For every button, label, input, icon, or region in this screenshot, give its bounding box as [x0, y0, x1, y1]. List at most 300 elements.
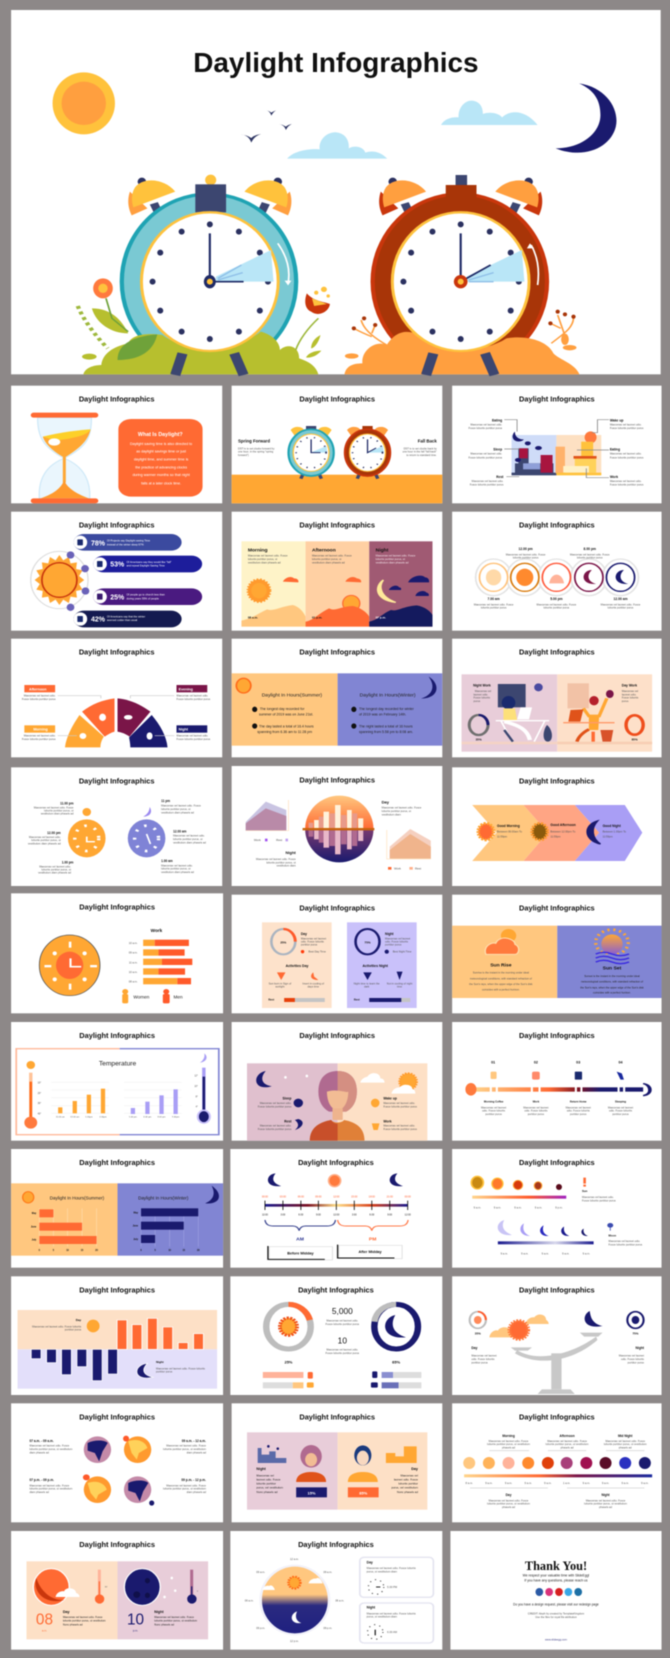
chevron: good night — [575, 805, 642, 861]
time notes: lobortis porttitor purus, ut vestibulum — [163, 1447, 207, 1451]
night side: laoreet odio. Fusce — [256, 1477, 281, 1481]
icon: red mini clock — [345, 426, 390, 479]
label: evening — [176, 685, 211, 701]
day side: laoreet odio. Fusce — [394, 1477, 418, 1481]
card: day: Activities Day — [286, 964, 308, 968]
time labels: lobortis porttitor purus — [608, 606, 634, 610]
sun phases: 9 a.m. — [514, 1206, 522, 1210]
day half: lobortis porttitor purus, ut vestibulum — [63, 1618, 106, 1622]
time axis — [262, 1196, 411, 1216]
panel: donut comparison: Daylight Infographics — [298, 1285, 374, 1294]
thermometer: hot: 10° — [38, 1082, 41, 1084]
panel: daily timeline — [452, 1022, 662, 1141]
night half: p.m. — [133, 1629, 138, 1632]
labels right: Maecenas vel laoreet odio. — [610, 422, 642, 426]
card: day: days time — [308, 984, 319, 988]
sun rise side: meteorological conditions, with standard refraction of — [470, 977, 532, 981]
panel: city globe and area charts: Daylight Infographics — [299, 775, 375, 784]
chevron: good night: Between 1.00pm To — [603, 830, 627, 834]
column: night: lobortis porttitor purus, ut — [376, 557, 405, 561]
sun rise side: coincides with a perfect horizon. — [482, 987, 520, 991]
right time notes: 1.00 am — [161, 859, 173, 863]
day work illustration: Fusce lobortis — [622, 696, 639, 700]
panel: thank you — [450, 1531, 662, 1650]
panel: balance scale: Daylight Infographics — [519, 1285, 595, 1294]
area chart day: Rest — [415, 867, 421, 871]
column: night: Night — [376, 547, 389, 553]
chevron: good morning: Good Morning — [497, 824, 520, 828]
area chart night: Work — [254, 838, 261, 842]
icon: crescent moon — [556, 83, 616, 153]
chart: winter hours: 0 — [140, 1250, 142, 1252]
red alarm clock — [344, 175, 579, 375]
sun set side: coincides with a perfect horizon. — [593, 991, 631, 995]
right time notes: vestibulum diam phasels ad — [173, 840, 206, 844]
panel: temperature charts — [11, 1022, 223, 1141]
heading row: Maecenas vel laoreet odio. Fusce — [489, 1439, 529, 1443]
time labels: Maecenas vel laoreet odio. Fusce — [537, 602, 577, 606]
panel: work chart with clock: Daylight Infographics — [79, 902, 155, 911]
left time notes: vestibulum diam phasels ad — [38, 871, 71, 875]
chart: winter hours: June — [133, 1226, 139, 1228]
panel: half day half night portrait — [232, 1022, 442, 1141]
lower notes: Maecenas vel laoreet odio. Fusce — [489, 1498, 529, 1502]
lower notes: Night — [602, 1493, 611, 1497]
note: day — [32, 1318, 100, 1332]
day work illustration: Day Work — [622, 684, 637, 688]
dial time labels: 12 p.m. — [290, 1639, 299, 1643]
heading row: Maecenas vel laoreet odio. Fusce — [547, 1439, 587, 1443]
chevron: good afternoon — [524, 805, 599, 861]
text: spring forward — [238, 439, 275, 457]
step 01 morning coffee: 01 — [491, 1061, 495, 1065]
heading: temperature: Temperature — [99, 1061, 136, 1068]
bar chart: day temperature: 2.00pm — [99, 1117, 107, 1119]
text: spring forward: Spring Forward — [238, 439, 270, 444]
card: night: time — [397, 984, 403, 988]
night side: Nunc phasels ad — [256, 1490, 278, 1494]
winter side: The longest day recorded for winter — [359, 707, 415, 711]
time labels: Maecenas vel laoreet odio. Fusce — [474, 602, 514, 606]
label: afternoon: Fusce lobortis porttitor purus — [22, 697, 56, 701]
label: evening: Maecenas vel laoreet odio. — [176, 694, 209, 698]
night half: 10 — [127, 1612, 144, 1629]
dial time labels: 09 p.m. — [256, 1626, 265, 1630]
gauge: night: Maecenas vel laoreet — [619, 1353, 644, 1357]
labels left: Fusce lobortis porttitor purus — [470, 483, 504, 487]
card: night: Night — [385, 932, 394, 936]
card: night: purus, ut vestibulum diam — [367, 1615, 398, 1619]
chevron: good morning: 11:59pm — [497, 834, 508, 838]
left time notes: Maecenas vel laoreet odio. — [39, 864, 71, 868]
time notes: Maecenas vel laoreet odio. Fusce — [29, 1483, 70, 1487]
time axis: 00:00 — [262, 1196, 269, 1199]
heading: thank you: Thank You! — [525, 1559, 587, 1573]
chart: winter hours: Daylight In Hours(Winter) — [138, 1195, 189, 1200]
step 04 sleeping: 04 — [618, 1061, 624, 1065]
night work illustration: Fusce lobortis — [474, 696, 491, 700]
time axis: 6:00 — [298, 1213, 304, 1216]
day half: Nunc phasels ad — [63, 1622, 83, 1626]
step 04 sleeping — [608, 1061, 633, 1116]
card: day: Insert in cooling of — [302, 981, 324, 985]
night half: Night — [154, 1610, 164, 1614]
bar chart: day temperature: 12.00 am — [70, 1117, 79, 1119]
hour labels: 9 a.m. — [544, 1481, 552, 1485]
card: night: Night — [367, 1606, 376, 1610]
card: night: 75% — [365, 940, 371, 944]
donut: night — [374, 1304, 418, 1364]
chart: summer hours: 5 — [53, 1250, 55, 1252]
bars: day — [117, 1318, 203, 1349]
area chart night — [246, 800, 288, 842]
night side: purus, vel vestibulum — [256, 1486, 284, 1490]
button: before midday: Before Midday — [287, 1251, 314, 1255]
panel: day and night activity cards — [232, 895, 442, 1013]
bracket: pm: PM — [369, 1236, 376, 1242]
floor band — [232, 475, 442, 503]
stat numbers — [325, 1306, 360, 1355]
moon phases: 9 a.m. — [562, 1251, 570, 1255]
icons: moons and sun — [268, 1173, 403, 1187]
time notes: 07 a.m. - 09 a.m. — [29, 1439, 54, 1443]
panel: day night dial — [230, 1531, 442, 1650]
gauge: night — [619, 1312, 645, 1365]
thank you note: If you have any questions, please reach us — [524, 1579, 588, 1583]
text: fall back: one hour in the fall "fall back" — [403, 450, 437, 454]
text: fall back: to return to standard time. — [406, 453, 437, 457]
day half: 08 — [36, 1612, 53, 1629]
stat pill 78% — [74, 534, 182, 551]
chart: summer hours: May — [32, 1213, 37, 1215]
text: spring forward: DST is to set clocks forward by — [238, 446, 275, 450]
left time notes: Maecenas vel laoreet odio. Fusce — [34, 805, 74, 809]
time notes — [29, 1439, 207, 1494]
chart: summer hours: 0 — [39, 1250, 41, 1252]
winter side: of 2019 was on February 14th. — [359, 713, 406, 717]
chevron: good afternoon: 11:59pm — [550, 834, 561, 838]
step 01 morning coffee: Maecenas vel laoreet — [481, 1105, 506, 1109]
labels right: Eating — [610, 448, 620, 452]
panel: what is daylight — [11, 386, 222, 503]
chevron: good afternoon: Between 12.00pm To — [550, 830, 576, 834]
time axis: 03:00 — [280, 1196, 287, 1199]
text: night — [256, 850, 297, 868]
text: fall back — [403, 439, 437, 457]
heading row: lobortis porttitor purus, ut vestibulum — [604, 1442, 647, 1446]
gauge: day: Day — [471, 1346, 478, 1350]
label: morning — [22, 725, 56, 741]
panel: greeting chevrons — [452, 767, 662, 886]
dial time labels: 06 a.m. — [245, 1598, 254, 1602]
day work illustration — [557, 674, 652, 752]
column: night: vestibulum diam phasels ad — [376, 560, 409, 564]
day side: lobortis porttitor — [398, 1482, 418, 1486]
night work illustration: Maecenas vel — [475, 689, 492, 693]
time notes: diam phasels ad — [29, 1450, 49, 1454]
hour labels: 9 a.m. — [583, 1481, 590, 1485]
step 01 morning coffee — [481, 1061, 506, 1116]
time axis: 9:00 — [316, 1213, 321, 1216]
chart: summer hours: 20 — [95, 1250, 99, 1252]
lower notes: Day — [506, 1493, 512, 1497]
column: night: Maecenas vel laoreet odio. Fusce — [376, 554, 416, 558]
hour labels: 8 a.m. — [466, 1481, 473, 1485]
labels left: Maecenas vel laoreet odio. — [472, 479, 504, 483]
lower notes: Maecenas vel laoreet odio. Fusce — [586, 1498, 626, 1502]
label: afternoon — [22, 685, 56, 701]
day half: Day — [63, 1610, 70, 1614]
time notes: lobortis porttitor purus, ut vestibulum — [163, 1487, 207, 1491]
day side — [338, 1432, 427, 1510]
credit text: Use the files for royal file attribution — [535, 1615, 577, 1619]
day side: purus, vel vestibulum — [391, 1486, 419, 1490]
day half: Maecenas vel laoreet odio. Fusce — [63, 1615, 103, 1619]
time axis: 00:00 — [405, 1196, 411, 1199]
stat numbers: Fusce lobortis porttitor purus — [325, 1322, 360, 1326]
dial — [261, 1566, 329, 1634]
panel: diverging bars — [11, 1276, 223, 1395]
icon: hourglass — [31, 413, 98, 503]
card: day: Best Day Time — [309, 950, 326, 954]
heading row: Mid Night — [618, 1434, 633, 1438]
gauge: day: Maecenas vel laoreet — [471, 1353, 497, 1357]
thermometer: cold: 10° — [194, 1086, 198, 1088]
heading row: lobortis porttitor purus, ut vestibulum — [487, 1442, 531, 1446]
time axis: 12:00 — [262, 1213, 269, 1216]
left time notes: 1.00 pm — [62, 860, 74, 864]
card: night: Maecenas vel laoreet — [385, 936, 411, 940]
moon phases: Maecenas vel laoreet odio. — [609, 1239, 641, 1243]
stat numbers: Maecenas vel laoreet odio. — [326, 1319, 358, 1323]
text: day: vestibulum diam — [382, 812, 402, 816]
chart: summer hours: 15 — [81, 1250, 84, 1252]
column: afternoon: 01 p.m. — [312, 616, 322, 620]
panel: night work and day work — [452, 639, 662, 757]
time notes: Maecenas vel laoreet odio. Fusce — [166, 1483, 207, 1487]
clouds and sun on scale — [489, 1315, 549, 1339]
callout: what is daylight: during warmer months so that night — [132, 473, 190, 477]
note: night — [137, 1360, 206, 1378]
notes right: Work — [383, 1119, 392, 1123]
left time notes: vestibulum diam phasels ad — [41, 812, 74, 816]
bar chart: night temperature: 6.00 pm — [144, 1117, 152, 1119]
labels left: Sleep — [493, 447, 502, 451]
thank you note — [523, 1574, 589, 1583]
day half: 30° — [105, 1586, 108, 1588]
column: night — [369, 541, 432, 627]
notes left: Rest — [284, 1119, 292, 1123]
step 02 work: porttitor purus — [528, 1112, 545, 1116]
city illustration — [512, 431, 601, 475]
colour circles — [463, 1457, 651, 1469]
card: day: 5.00 PM — [387, 1585, 397, 1589]
time notes: 09 p.m. - 12 p.m. — [181, 1478, 206, 1482]
stat pill 78%: Of Projects say Daylight saving Time — [107, 538, 151, 542]
icon: cloud centre — [287, 132, 387, 159]
panel: am pm scale: Daylight Infographics — [298, 1158, 374, 1167]
panel: night and day people: Daylight Infographics — [299, 1413, 375, 1422]
blue alarm clock — [83, 175, 318, 375]
panel: daily timeline: Daylight Infographics — [519, 1031, 595, 1040]
stat pill 78%: instead of the winter sleep 67% — [107, 542, 144, 546]
right time notes: lobortis porttitor purus, ut — [173, 837, 203, 841]
stat pill 78%: 78% — [91, 541, 106, 548]
panel: two clocks with times — [11, 767, 222, 886]
label: morning: Morning — [33, 728, 48, 732]
ring row — [476, 559, 638, 596]
thermometer: hot — [24, 1061, 41, 1129]
sun rise side: Sunrise is the instant in the morning under ideal — [473, 970, 529, 974]
gauge: day: odio. Fusce lobortis — [471, 1357, 495, 1361]
time labels: lobortis porttitor purus — [577, 556, 603, 560]
summer side: spanning from 6.36 am to 11:28 pm — [257, 730, 312, 734]
heading row: Afternoon — [560, 1434, 575, 1438]
website: www.slideegg.com — [545, 1637, 568, 1641]
column: afternoon: lobortis porttitor purus, ut — [312, 557, 342, 561]
panel: sun percentage pills: Daylight Infographics — [79, 520, 154, 529]
night side — [247, 1432, 338, 1510]
labels left: Maecenas vel laoreet odio. — [470, 452, 502, 456]
design request text: Do you have a design request, please visit our redesign page — [513, 1603, 599, 1607]
moon phases — [498, 1220, 643, 1255]
bar chart: work — [129, 928, 192, 984]
sun rise side: the Sun's rays, when the upper edge of the Sun's disk — [469, 982, 533, 986]
label: afternoon: Maecenas vel laoreet odio. — [24, 694, 56, 698]
chart: summer hours: June — [31, 1226, 37, 1228]
label: afternoon: Afternoon — [29, 687, 47, 691]
night work illustration: purus — [474, 699, 481, 703]
note: day: porttitor purus — [65, 1328, 82, 1332]
area chart day — [387, 829, 431, 871]
chart: summer hours: Daylight In Hours(Summer) — [50, 1195, 105, 1200]
left time notes — [28, 801, 74, 875]
area chart night: Rest — [276, 838, 282, 842]
chart: winter hours: 10 — [168, 1250, 172, 1252]
night half: Maecenas vel laoreet odio. Fusce — [154, 1615, 195, 1619]
sun phases: Maecenas vel laoreet odio. — [582, 1195, 614, 1199]
stat pill 42%: seemed colder than usual — [107, 618, 138, 622]
gauge: night: Night — [636, 1346, 645, 1350]
panel: day and night planets — [11, 1531, 223, 1650]
stat pill 25%: during years 55% of people — [126, 596, 159, 600]
card: night: Not in cooling of night — [387, 981, 413, 985]
dial time labels — [245, 1557, 344, 1643]
heading row: phasels ad — [502, 1445, 515, 1449]
semicircle chart — [65, 698, 168, 747]
sun rise side: Sun Rise — [490, 962, 512, 968]
card: night: Activities Night — [363, 964, 389, 968]
left time notes: lobortis porttitor purus, ut — [44, 808, 74, 812]
icon: night moon — [256, 1071, 308, 1087]
time notes: Maecenas vel laoreet odio. Fusce — [29, 1444, 70, 1448]
panel: half day half night portrait: Daylight Infographics — [299, 1031, 375, 1040]
label: morning: Fusce lobortis porttitor purus — [22, 737, 56, 741]
panel: day and night activity cards: Daylight Infographics — [299, 904, 375, 913]
right time notes: vestibulum diam phasels ad — [161, 870, 194, 874]
time axis: 3:00 — [280, 1213, 286, 1216]
icon: sun — [53, 72, 115, 134]
day half background — [338, 1063, 427, 1141]
panel: what is daylight: Daylight Infographics — [79, 395, 154, 404]
bar chart: work: 09 a.m. — [129, 951, 138, 955]
label: night: Fusce lobortis porttitor purus — [176, 737, 211, 741]
time notes: diam phasels ad — [187, 1490, 207, 1494]
notes left: Maecenas vel laoreet odio. — [260, 1124, 292, 1128]
chevron: good night: 11:59pm — [603, 834, 613, 838]
winter side: spanning from 5.58 pm to 8:08 am. — [359, 730, 413, 734]
notes right: Fusce lobortis porttitor purus — [383, 1104, 418, 1108]
card: night: Rest — [354, 998, 360, 1002]
time labels: 12.00 pm — [519, 547, 533, 551]
time axis: 15:00 — [351, 1196, 358, 1199]
stat numbers: 5,000 — [332, 1306, 353, 1316]
card: day — [360, 1557, 433, 1597]
text: spring forward: forward") — [238, 453, 249, 457]
column: afternoon: Afternoon — [312, 547, 336, 553]
time notes: diam phasels ad — [187, 1450, 207, 1454]
dial time labels: 09 a.m. — [256, 1570, 265, 1574]
panel: sun rise and sun set — [452, 895, 662, 1013]
panel: am pm scale — [230, 1149, 442, 1268]
card: night — [360, 1603, 433, 1643]
social icons — [535, 1588, 582, 1596]
step 03 return home — [566, 1061, 591, 1116]
bar chart: day temperature — [51, 1082, 109, 1119]
time labels: Maecenas vel laoreet odio. Fusce — [601, 602, 641, 606]
panel: morning afternoon night: Daylight Infographics — [299, 520, 375, 529]
night work illustration: 35% — [476, 738, 482, 742]
gradient timeline — [465, 1083, 651, 1096]
bar chart: day temperature: 11.00 am — [56, 1117, 65, 1119]
callout: what is daylight — [118, 419, 203, 497]
day work illustration: 85% — [632, 738, 638, 742]
summer side: The day lasted a total of 16.4 hours — [259, 724, 314, 728]
column: morning: Morning — [248, 547, 268, 553]
panel: night work and day work: Daylight Infographics — [519, 648, 595, 657]
chevron: good morning — [472, 805, 548, 861]
right time notes: lobortis porttitor purus, ut — [161, 807, 191, 811]
column: night: 07 p.m. — [376, 616, 386, 620]
callout: what is daylight: daylight time, and summer time is — [134, 458, 189, 462]
panel: city globe and area charts — [232, 766, 442, 886]
stat pill 42% — [74, 611, 182, 627]
card: day: Maecenas vel laoreet odio. Fusce lobortis — [367, 1566, 416, 1570]
day side: Maecenas vel — [400, 1473, 418, 1477]
heading row: Maecenas vel laoreet odio. Fusce — [605, 1439, 646, 1443]
callout: what is daylight: What Is Daylight? — [138, 432, 183, 438]
label: evening: Fusce lobortis porttitor purus — [176, 697, 211, 701]
moon phases: Fusce lobortis porttitor purus — [609, 1242, 643, 1246]
note: night: porttitor purus — [156, 1370, 173, 1374]
lower notes — [487, 1493, 628, 1509]
stat pill 53%: and repeal Daylight Saving Time — [126, 564, 165, 568]
illustration: scale — [511, 1333, 603, 1394]
moon phases: 9 a.m. — [521, 1251, 529, 1255]
night half: Nunc phasels ad — [154, 1622, 175, 1626]
legend: women and men: Women — [133, 994, 150, 999]
chart: summer hours: July — [32, 1240, 37, 1242]
panel: spring forward and fall back — [232, 386, 442, 503]
dial time labels: 12 a.m. — [290, 1557, 299, 1561]
step 01 morning coffee: odio. Fusce lobortis — [482, 1109, 506, 1113]
bands — [18, 1310, 217, 1389]
day work illustration: Maecenas vel — [622, 689, 639, 693]
chevron: good night: Good Night — [603, 824, 622, 828]
notes left: Fusce lobortis porttitor purus — [258, 1104, 292, 1108]
card: day: sunlight — [275, 984, 285, 988]
card: night — [347, 922, 417, 1008]
